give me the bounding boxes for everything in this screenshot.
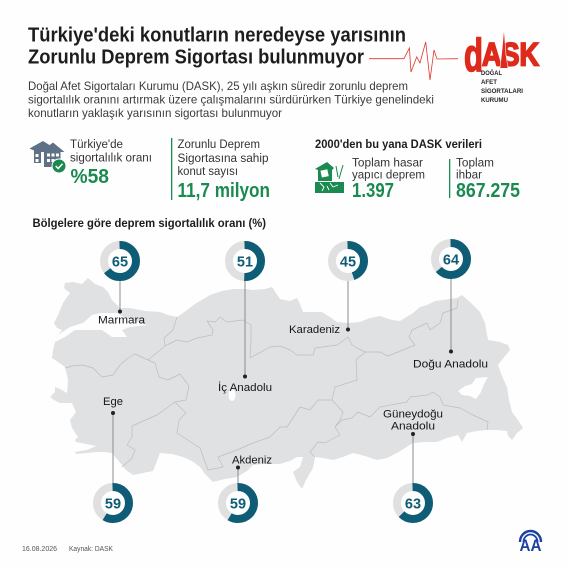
heading: regions: Bölgelere göre deprem sigortalılık oranı (%) bbox=[32, 216, 266, 230]
stat: total claims bbox=[449, 156, 520, 202]
stat: damaging earthquakes: yapıcı deprem bbox=[352, 168, 425, 182]
intro paragraph: sigortalılık oranını artırmak üzere çalışmalarını sürdürürken Türkiye genelindeki bbox=[28, 92, 434, 106]
logo: DASK: ASK bbox=[482, 36, 539, 72]
region: İç Anadolu bbox=[218, 245, 272, 394]
logo: DASK: SİGORTALARI bbox=[481, 87, 523, 95]
region: Doğu Anadolu: Doğu Anadolu bbox=[413, 358, 488, 370]
region: Güneydoğu Anadolu bbox=[383, 408, 443, 519]
logo: DASK bbox=[464, 28, 539, 104]
region: Marmara bbox=[98, 245, 146, 326]
region: İç Anadolu: İç Anadolu bbox=[218, 381, 272, 394]
stat: total claims: Toplam bbox=[456, 156, 494, 170]
stat: insurance rate: %58 bbox=[70, 165, 109, 188]
stat: insurance rate: sigortalılık oranı bbox=[70, 151, 152, 165]
region: Güneydoğu Anadolu: 63 bbox=[405, 496, 421, 512]
stat: total claims: 867.275 bbox=[456, 179, 520, 202]
region: Karadeniz: Karadeniz bbox=[289, 324, 340, 336]
logo: DASK: AFET bbox=[481, 79, 497, 86]
title bbox=[28, 24, 406, 68]
stat: insured homes: konut sayısı bbox=[178, 164, 238, 178]
stat: damaging earthquakes: 1.397 bbox=[352, 179, 394, 202]
region: Ege: 59 bbox=[105, 496, 121, 512]
region: Güneydoğu Anadolu: Anadolu bbox=[391, 420, 435, 432]
region: Ege: Ege bbox=[103, 396, 123, 408]
title: Zorunlu Deprem Sigortası bulunmuyor bbox=[28, 46, 364, 68]
stat: insured homes: Zorunlu Deprem bbox=[178, 137, 260, 151]
region: Karadeniz bbox=[289, 245, 364, 336]
stat: damaging earthquakes bbox=[352, 156, 425, 202]
intro paragraph bbox=[28, 79, 434, 120]
stat: insurance rate bbox=[70, 137, 152, 188]
icon: houses with check mark bbox=[30, 141, 66, 173]
title: Türkiye'deki konutların neredeyse yarısının bbox=[28, 24, 406, 46]
region: İç Anadolu: 51 bbox=[237, 254, 253, 270]
logo: AA: AA bbox=[520, 536, 542, 555]
intro paragraph: Doğal Afet Sigortaları Kurumu (DASK), 25 yılı aşkın süredir zorunlu deprem bbox=[28, 79, 408, 93]
map of Turkey bbox=[50, 278, 523, 489]
icon: seismograph line bbox=[369, 42, 458, 80]
region: Marmara: Marmara bbox=[98, 314, 146, 326]
region: Akdeniz: Akdeniz bbox=[232, 454, 272, 466]
region: Doğu Anadolu: 64 bbox=[443, 252, 459, 268]
region: Akdeniz bbox=[222, 454, 272, 519]
region: Karadeniz: 45 bbox=[340, 254, 356, 270]
intro paragraph: konutların yaklaşık yarısının sigortası bulunmuyor bbox=[28, 106, 282, 120]
region: Marmara: 65 bbox=[112, 254, 128, 270]
icon: damaged house bbox=[315, 162, 344, 193]
stat: insured homes: 11,7 milyon bbox=[178, 179, 270, 202]
logo: DASK: DOĞAL bbox=[481, 68, 502, 77]
logo: DASK: d bbox=[464, 29, 483, 81]
heading: DASK data: 2000'den bu yana DASK verileri bbox=[315, 137, 482, 151]
stat: insurance rate: Türkiye'de bbox=[70, 137, 123, 151]
footer: date and source bbox=[22, 546, 113, 553]
footer: date and source: 16.08.2026 bbox=[22, 546, 57, 553]
region: Ege bbox=[97, 396, 129, 519]
stat: total claims: ihbar bbox=[456, 168, 482, 182]
stat: insured homes bbox=[171, 137, 270, 202]
region: Güneydoğu Anadolu: Güneydoğu bbox=[383, 408, 443, 420]
region: Doğu Anadolu bbox=[413, 243, 488, 370]
footer: date and source: Kaynak: DASK bbox=[69, 546, 113, 553]
stat: damaging earthquakes: Toplam hasar bbox=[352, 156, 423, 170]
region: Akdeniz: 59 bbox=[230, 496, 246, 512]
stat: insured homes: Sigortasına sahip bbox=[178, 151, 269, 165]
logo: DASK: KURUMU bbox=[481, 97, 508, 104]
